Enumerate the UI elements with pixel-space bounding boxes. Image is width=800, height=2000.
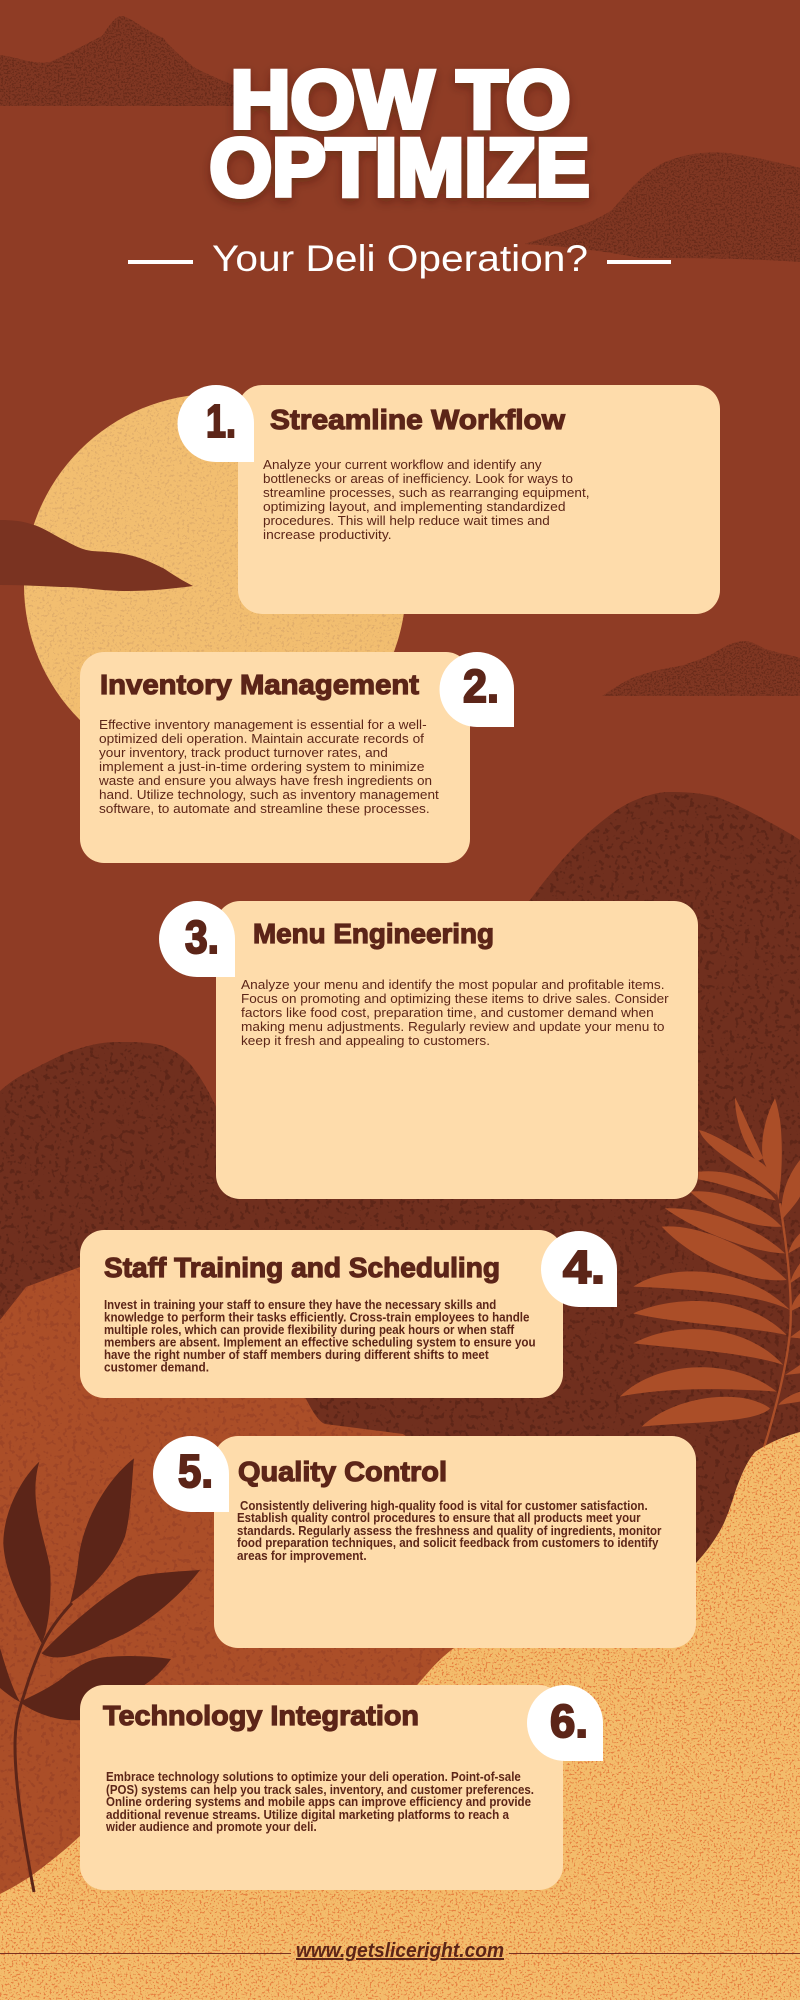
heading 1: Streamline Workflow <box>270 404 565 435</box>
heading 4: Staff Training and Scheduling <box>104 1252 500 1283</box>
body text 3: keep it fresh and appealing to customers. <box>241 1033 490 1048</box>
orange blob: lower left <box>0 1267 560 1910</box>
subtitle with rules: Your Deli Operation? <box>212 238 588 279</box>
hill: top right <box>525 152 800 262</box>
body text 3: Focus on promoting and optimizing these items to drive sales. Consider <box>241 991 669 1006</box>
badge 6 <box>527 1685 603 1761</box>
body text 6: wider audience and promote your deli. <box>105 1820 317 1834</box>
title <box>210 54 590 214</box>
body text 1: optimizing layout, and implementing standardized <box>263 499 566 514</box>
body text 3 <box>241 977 669 1048</box>
body text 4: members are absent. Implement an effective scheduling system to ensure you <box>104 1336 536 1350</box>
body text 6 <box>105 1770 534 1834</box>
sun circle <box>24 394 406 776</box>
badge 5 <box>153 1436 229 1512</box>
body text 5: standards. Regularly assess the freshness and quality of ingredients, monitor <box>237 1524 662 1538</box>
body text 2: software, to automate and streamline these processes. <box>99 801 430 816</box>
body text 6: (POS) systems can help you track sales, inventory, and customer preferences. <box>106 1783 534 1797</box>
icon: fern leaf right <box>620 1097 800 1450</box>
body text 2: optimized deli operation. Maintain accurate records of <box>99 731 424 746</box>
body text 1: procedures. This will help reduce wait times and <box>263 513 550 528</box>
body text 3: factors like food cost, preparation time, and customer demand when <box>241 1005 654 1020</box>
body text 3: Analyze your menu and identify the most popular and profitable items. <box>241 977 664 992</box>
body text 3: making menu adjustments. Regularly review and update your menu to <box>241 1019 664 1034</box>
body text 4: customer demand. <box>104 1360 209 1374</box>
badge 6: 6. <box>550 1695 588 1747</box>
panel: step 5 quality control <box>153 1436 696 1648</box>
body text 2: your inventory, track product turnover rates, and <box>99 745 388 760</box>
body text 4: have the right number of staff members during different shifts to meet <box>104 1348 489 1362</box>
body text 1: increase productivity. <box>263 527 392 542</box>
heading 2: Inventory Management <box>100 669 419 700</box>
body text 5: Consistently delivering high-quality food is vital for customer satisfaction. <box>240 1499 648 1513</box>
body text 4: Invest in training your staff to ensure they have the necessary skills and <box>104 1298 496 1312</box>
body text 5: food preparation techniques, and solicit feedback from customers to identify <box>237 1536 658 1550</box>
hill: top left <box>0 16 270 106</box>
subtitle with rules <box>128 238 671 279</box>
body text 1 <box>263 457 590 542</box>
badge 1: 1. <box>206 395 236 447</box>
body text 4: knowledge to perform their tasks efficiently. Cross-train employees to handle <box>104 1310 530 1324</box>
body text 1: Analyze your current workflow and identify any <box>263 457 542 472</box>
heading 6: Technology Integration <box>103 1700 419 1731</box>
body text 4: multiple roles, which can provide flexibility during peak hours or when staff <box>104 1323 515 1337</box>
body text 4 <box>104 1298 536 1374</box>
badge 3: 3. <box>185 911 219 963</box>
body text 2: implement a just-in-time ordering system to minimize <box>99 759 425 774</box>
badge 3 <box>159 901 235 977</box>
hill: right small <box>602 641 800 696</box>
body text 5 <box>237 1499 662 1563</box>
badge 2 <box>440 652 514 727</box>
body text 6: Online ordering systems and mobile apps can improve efficiency and provide <box>106 1795 531 1809</box>
badge 4: 4. <box>563 1241 605 1293</box>
body text 6: additional revenue streams. Utilize digital marketing platforms to reach a <box>106 1808 510 1822</box>
body text 5: areas for improvement. <box>237 1549 367 1563</box>
body text 2: hand. Utilize technology, such as inventory management <box>99 787 439 802</box>
icon: plant left <box>0 1458 200 1892</box>
badge 1 <box>178 385 254 462</box>
panel: step 3 menu engineering <box>159 901 698 1199</box>
dark blob: right and left masses <box>0 792 800 1600</box>
body text 6: Embrace technology solutions to optimize your deli operation. Point-of-sale <box>106 1770 521 1784</box>
heading 5: Quality Control <box>238 1456 447 1487</box>
body text 1: bottlenecks or areas of inefficiency. Look for ways to <box>263 471 573 486</box>
hill: over the sun <box>0 520 193 591</box>
panel: step 2 inventory management <box>80 652 514 863</box>
body text 1: streamline processes, such as rearranging equipment, <box>263 485 590 500</box>
panel: step 6 technology integration <box>80 1685 603 1890</box>
panel: step 1 streamline workflow <box>178 385 720 614</box>
badge 5: 5. <box>178 1445 213 1497</box>
body text 2: Effective inventory management is essential for a well- <box>99 717 427 732</box>
body text 2 <box>98 717 439 816</box>
badge 4 <box>541 1231 617 1307</box>
light orange blob: bottom <box>0 1432 800 2000</box>
title: HOW TO <box>230 54 570 146</box>
panel: step 4 staff training and scheduling <box>80 1230 617 1398</box>
footer: website url with rules: www.getsliceright.com <box>296 1940 504 1962</box>
heading 3: Menu Engineering <box>253 918 494 949</box>
badge 2: 2. <box>463 660 499 712</box>
body text 2: waste and ensure you always have fresh ingredients on <box>98 773 432 788</box>
title: OPTIMIZE <box>210 122 590 214</box>
body text 5: Establish quality control procedures to ensure that all products meet your <box>237 1511 641 1525</box>
